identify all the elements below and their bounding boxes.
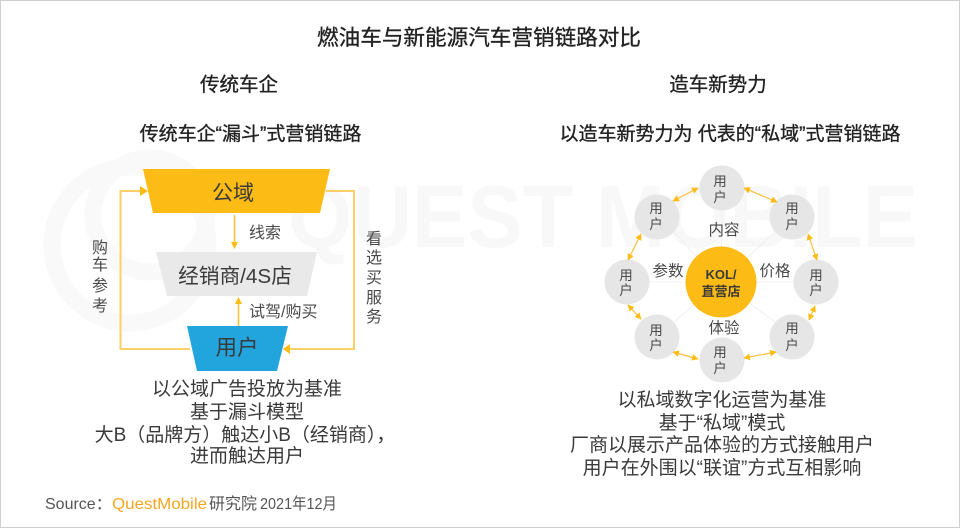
user node labels: 户 bbox=[713, 360, 727, 376]
source note bbox=[45, 495, 337, 513]
heading: traditional automakers: 传统车企 bbox=[200, 74, 278, 96]
label: price: 价格 bbox=[759, 262, 791, 280]
label: viewing and buying service bbox=[366, 230, 382, 326]
user node labels: 户 bbox=[619, 282, 633, 298]
subheading: funnel chain: 传统车企“漏斗”式营销链路 bbox=[140, 123, 361, 145]
label: leads: 线索 bbox=[249, 224, 281, 242]
user node labels: 用 bbox=[713, 345, 727, 360]
user node labels: 户 bbox=[649, 337, 663, 353]
funnel tier: users: 用户 bbox=[215, 336, 259, 360]
heading: new automakers: 造车新势力 bbox=[669, 74, 767, 96]
label: purchase reference: 车 bbox=[92, 256, 108, 274]
arrow: leads bbox=[231, 215, 238, 249]
source note: Source： bbox=[45, 496, 112, 513]
text block: funnel description: 以公域广告投放为基准 bbox=[152, 378, 342, 400]
arrow: test drive and purchase bbox=[235, 297, 242, 326]
user node labels: 用 bbox=[785, 201, 799, 216]
source note: QuestMobile bbox=[112, 496, 207, 513]
label: viewing and buying service: 选 bbox=[366, 249, 382, 267]
label: test drive and purchase: 试驾/购买 bbox=[249, 303, 317, 321]
user nodes bbox=[604, 166, 838, 382]
text block: private domain description: 厂商以展示产品体验的方式接触用户 bbox=[570, 434, 874, 456]
user node labels bbox=[619, 174, 823, 376]
funnel tier: users bbox=[187, 326, 288, 371]
feedback line: viewing and buying service bbox=[283, 191, 354, 354]
label: purchase reference: 考 bbox=[92, 297, 108, 315]
user node labels: 户 bbox=[785, 337, 799, 353]
label: purchase reference bbox=[92, 239, 108, 315]
centre node: KOL and direct stores: 直营店 bbox=[701, 284, 741, 299]
funnel diagram bbox=[92, 169, 382, 371]
label: viewing and buying service: 服 bbox=[366, 289, 382, 307]
watermark: Quest Mobile logo and wordmark bbox=[52, 158, 918, 323]
subheading: private domain chain: 以造车新势力为 代表的“私域”式营销链路 bbox=[560, 123, 900, 145]
text block: private domain description: 用户在外围以“联谊”方式互相影响 bbox=[583, 457, 861, 479]
feedback line: purchase reference bbox=[120, 186, 190, 349]
label: purchase reference: 参 bbox=[92, 277, 108, 295]
user node labels: 户 bbox=[785, 216, 799, 232]
user node labels: 户 bbox=[713, 189, 727, 205]
source note: 2021年12月 bbox=[260, 495, 337, 513]
text block: funnel description: 基于漏斗模型 bbox=[190, 401, 304, 423]
spokes bbox=[649, 210, 795, 322]
user node labels: 用 bbox=[649, 201, 663, 216]
label: parameters: 参数 bbox=[652, 262, 684, 280]
title: 燃油车与新能源汽车营销链路对比 bbox=[317, 25, 641, 50]
label: viewing and buying service: 务 bbox=[366, 308, 382, 326]
funnel tier: dealers: 经销商/4S店 bbox=[178, 265, 292, 288]
label: purchase reference: 购 bbox=[92, 239, 108, 257]
watermark: Quest Mobile logo and wordmark: QUEST MOBILE bbox=[288, 167, 918, 266]
label: content: 内容 bbox=[708, 221, 740, 239]
text block: private domain description: 以私域数字化运营为基准 bbox=[617, 389, 827, 411]
centre node: KOL and direct stores: KOL/ bbox=[705, 267, 737, 282]
user node labels: 用 bbox=[785, 321, 799, 336]
text block: funnel description: 大B（品牌方）触达小B（经销商）， bbox=[95, 424, 395, 446]
user node labels: 用 bbox=[713, 174, 727, 189]
funnel tier: public domain bbox=[143, 169, 330, 213]
user node labels: 用 bbox=[619, 268, 633, 283]
text block: funnel description: 进而触达用户 bbox=[190, 445, 304, 467]
ecosystem diagram bbox=[604, 166, 838, 382]
centre node: KOL and direct stores bbox=[686, 246, 756, 318]
user node labels: 用 bbox=[649, 323, 663, 338]
double arrows between users bbox=[628, 188, 817, 359]
user node labels: 户 bbox=[809, 282, 823, 298]
text block: private domain description bbox=[570, 389, 874, 479]
funnel tier: public domain: 公域 bbox=[212, 182, 254, 205]
text block: private domain description: 基于“私域”模式 bbox=[659, 412, 785, 434]
funnel tier: dealers bbox=[156, 252, 317, 296]
label: viewing and buying service: 看 bbox=[366, 230, 382, 248]
label: experience: 体验 bbox=[708, 319, 740, 337]
label: viewing and buying service: 买 bbox=[366, 269, 382, 287]
source note: 研究院 bbox=[209, 495, 257, 513]
text block: funnel description bbox=[95, 378, 395, 467]
user node labels: 用 bbox=[809, 268, 823, 283]
user node labels: 户 bbox=[649, 216, 663, 232]
